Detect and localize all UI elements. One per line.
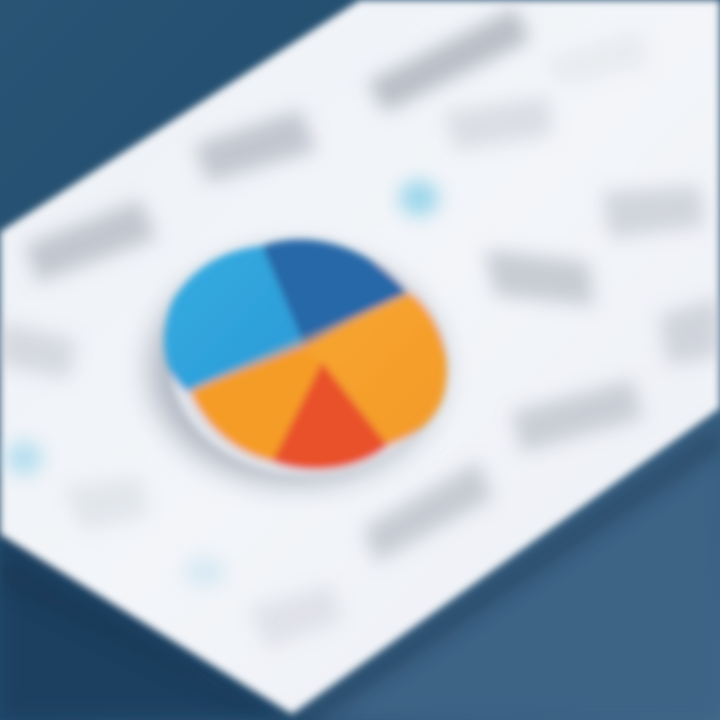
label: left <box>26 200 156 282</box>
label: top centre second line <box>445 96 552 150</box>
label: top right <box>545 30 650 85</box>
icon: cyan dot left <box>6 441 42 475</box>
slice: dark blue <box>262 240 408 345</box>
label: top centre <box>368 8 530 112</box>
slice: right orange <box>300 292 447 446</box>
label: lower centre <box>364 462 492 562</box>
label: bottom centre <box>250 585 342 648</box>
icon: cyan dot top <box>399 180 439 216</box>
paper shadow <box>0 425 720 720</box>
icon: pale blue dot bottom <box>185 557 225 587</box>
pie shadow <box>150 252 442 484</box>
label: right <box>602 186 704 238</box>
pie chart <box>164 240 447 476</box>
label: far right <box>660 298 720 365</box>
label: lower right <box>512 380 642 452</box>
label: lower left <box>65 476 148 530</box>
slice: left orange <box>190 345 322 462</box>
slice divider <box>192 294 408 390</box>
pie base rim <box>170 248 446 476</box>
label: centre right <box>485 250 594 305</box>
slice: red <box>272 362 388 470</box>
slice: light blue <box>164 246 304 392</box>
label: upper left <box>195 110 316 182</box>
label: far left <box>0 322 75 378</box>
